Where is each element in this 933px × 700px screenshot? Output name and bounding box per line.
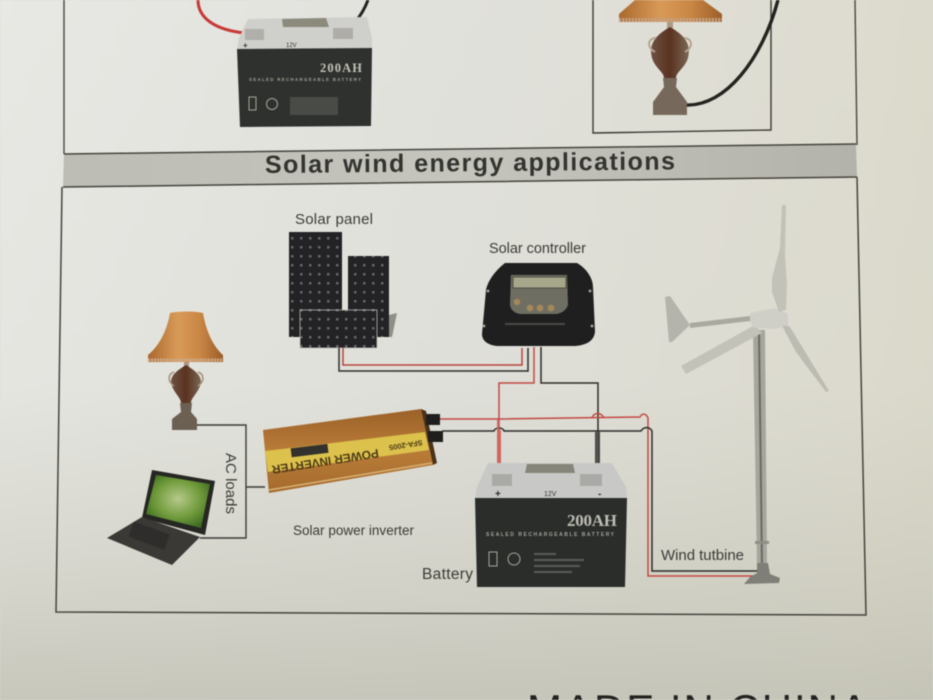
black cable — [338, 0, 368, 33]
main battery — [475, 463, 627, 587]
lamp handles — [169, 372, 203, 386]
label: solar controller: Solar controller — [489, 241, 586, 257]
panel front — [300, 310, 377, 348]
inverter lower edge — [269, 463, 432, 490]
battery info block — [290, 97, 338, 115]
lamp shade — [619, 0, 722, 22]
inverter end cap — [421, 409, 437, 465]
controller faceplate — [510, 275, 568, 314]
controller caption strip — [505, 323, 565, 325]
lamp handles — [649, 38, 691, 52]
battery subtitle: SEALED RECHARGEABLE BATTERY — [486, 532, 615, 538]
lamp urn — [171, 365, 201, 403]
solar panels — [289, 232, 397, 348]
lamp shade — [148, 312, 223, 362]
label: AC loads: AC loads — [222, 453, 239, 514]
lamp stem — [184, 362, 189, 369]
wiring: panels to controller — [339, 348, 528, 371]
solar controller — [482, 263, 595, 346]
tower base — [744, 563, 780, 584]
battery plus: + — [495, 489, 501, 500]
panel right — [348, 256, 389, 337]
inverter — [263, 409, 443, 493]
battery body — [237, 48, 372, 127]
lamp stem — [667, 22, 673, 30]
battery info lines — [534, 553, 584, 573]
battery minus: - — [598, 489, 601, 500]
tower collar — [755, 541, 769, 544]
wind turbine — [665, 205, 829, 584]
inverter gauge — [291, 444, 328, 457]
upper lamp box — [593, 0, 771, 133]
upper lamp with cable — [619, 0, 778, 115]
label: wind turbine: Wind tutbine — [661, 547, 744, 564]
panel: heading band — [63, 144, 857, 187]
tower — [753, 330, 767, 567]
controller body — [482, 263, 595, 346]
tail boom — [690, 316, 750, 328]
battery body — [475, 498, 627, 587]
laptop keyboard base — [107, 517, 200, 565]
red cable — [198, 0, 245, 33]
lamp base — [172, 403, 197, 430]
controller buttons — [514, 299, 554, 311]
lamp base — [653, 78, 687, 115]
panel shadow — [389, 313, 397, 337]
upper blade — [772, 205, 787, 312]
lamp cable — [687, 0, 778, 105]
hub — [750, 308, 788, 329]
lamp fringe — [148, 358, 223, 362]
battery icons — [489, 552, 520, 566]
battery icons — [249, 97, 278, 110]
lamp urn — [651, 27, 689, 78]
upper battery with cables — [198, 0, 372, 127]
right blade — [780, 322, 829, 392]
battery voltage: 12V — [544, 491, 557, 498]
battery polarity labels: + — [243, 41, 248, 50]
label: solar panel: Solar panel — [295, 211, 373, 228]
tail fin — [665, 296, 690, 342]
battery subtitle: SEALED RECHARGEABLE BATTERY — [249, 77, 361, 82]
lower-left blade — [681, 325, 762, 374]
wiring: controller to battery — [499, 347, 598, 470]
inverter label text: POWER INVERTER — [271, 446, 380, 477]
controller screen — [513, 277, 566, 288]
lower lamp — [148, 312, 223, 430]
laptop display — [146, 475, 210, 528]
lamp fringe — [619, 18, 722, 22]
battery rating: 200AH — [567, 511, 617, 530]
laptop — [107, 470, 215, 565]
inverter terminals — [426, 414, 443, 442]
heading: Solar wind energy applications — [265, 147, 675, 179]
battery rating: 200AH — [320, 61, 362, 75]
battery voltage label: 12V — [286, 43, 297, 49]
wiring: inverter bus to battery and turbine — [440, 414, 761, 576]
label: solar power inverter: Solar power inverter — [293, 523, 414, 538]
controller screws — [483, 290, 593, 327]
inverter yellow label — [265, 432, 429, 472]
label: battery: Battery — [422, 566, 473, 583]
inverter model: SFA-2005 — [388, 438, 423, 452]
panel: upper application frame — [64, 0, 857, 154]
battery cap — [475, 463, 627, 498]
panel: lower system diagram frame — [56, 177, 866, 615]
battery cap — [237, 17, 372, 49]
laptop screen frame — [142, 470, 215, 535]
inverter casing — [263, 409, 433, 493]
panel left — [289, 232, 342, 337]
wiring: AC loads — [197, 425, 265, 538]
